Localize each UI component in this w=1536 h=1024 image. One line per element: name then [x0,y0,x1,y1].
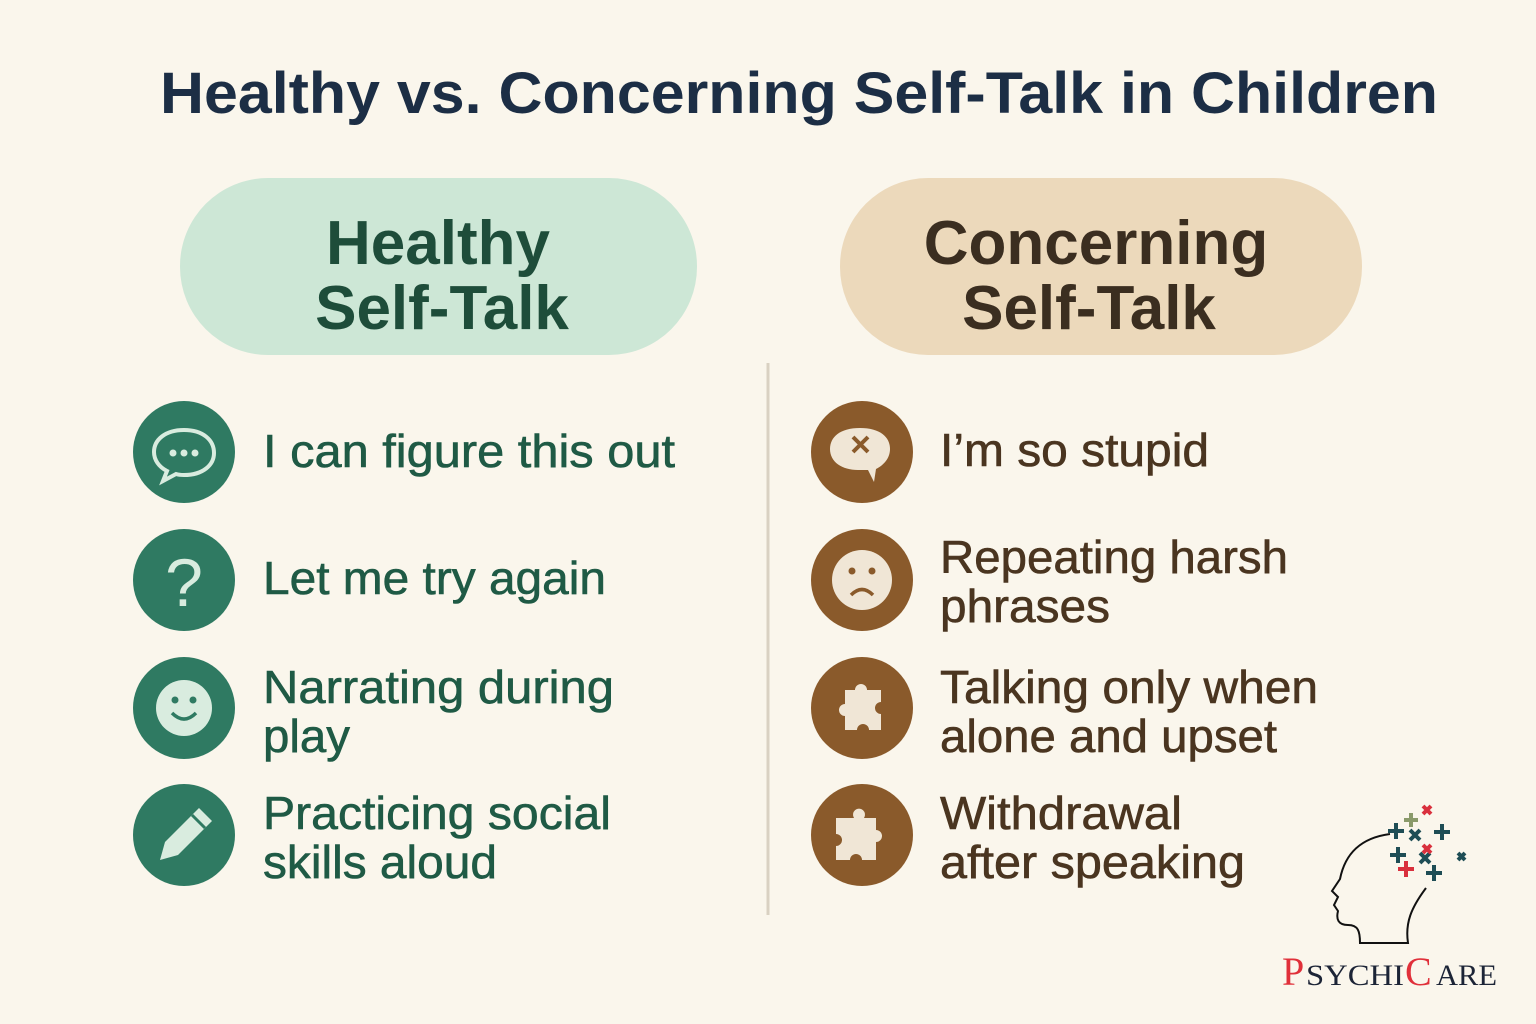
concerning item 3: Talking only when [940,661,1318,713]
logo: PsychiCare: P [1282,949,1304,994]
healthy item 3: Narrating during [263,661,614,713]
logo: PsychiCare [1282,806,1497,994]
healthy item 2 [133,529,606,631]
pill: concerning header [840,178,1362,355]
concerning item 1: I’m so stupid [940,424,1209,476]
healthy item 3 [133,657,614,762]
healthy item 2: Let me try again [263,552,606,604]
healthy item 1 [133,401,675,503]
logo: PsychiCare: ARE [1436,959,1497,992]
concerning item 4 [811,784,1245,888]
concerning item 3 [811,657,1318,762]
icon: smiley [133,657,235,759]
concerning item 1 [811,401,1209,503]
icon: question mark [133,529,235,631]
pill: healthy header: Self-Talk [315,274,569,343]
pill: healthy header [180,178,697,355]
icon: puzzle piece [811,784,913,886]
icon: question mark: ? [165,545,203,621]
healthy item 4 [133,784,611,888]
concerning item 4: after speaking [940,836,1245,888]
healthy item 3: play [263,710,350,762]
logo: PsychiCare: C [1405,949,1432,994]
icon: speech bubble with x [811,401,913,503]
healthy item 4: skills aloud [263,836,497,888]
concerning item 2: Repeating harsh [940,531,1288,583]
icon: pencil [133,784,235,886]
pill: concerning header: Self-Talk [962,274,1216,343]
icon: sad face [811,529,913,631]
pill: healthy header: Healthy [326,209,550,278]
title: Healthy vs. Concerning Self-Talk in Children [160,61,1438,126]
healthy item 1: I can figure this out [263,425,675,477]
concerning item 2: phrases [940,580,1110,632]
concerning item 2 [811,529,1288,632]
pill: concerning header: Concerning [924,209,1268,278]
icon: speech bubble [133,401,235,503]
logo: PsychiCare: SYCHI [1306,959,1404,992]
concerning item 3: alone and upset [940,710,1277,762]
icon: puzzle piece [811,657,913,759]
concerning item 4: Withdrawal [940,787,1182,839]
healthy item 4: Practicing social [263,787,611,839]
